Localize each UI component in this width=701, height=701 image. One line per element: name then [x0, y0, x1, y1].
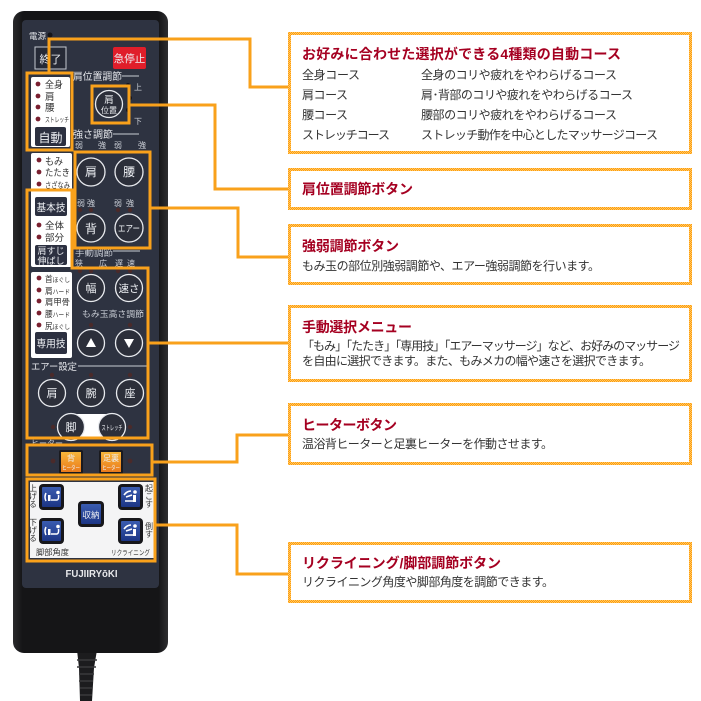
strength control: 強さ調節 [73, 128, 113, 141]
air settings: 座 [124, 387, 136, 400]
emergency stop button: 急停止 [114, 52, 145, 65]
panel: automatic courses: ストレッチコース [302, 128, 390, 142]
reclining and leg panel [28, 482, 155, 558]
auto course panel [31, 77, 70, 147]
auto course panel: ストレッチ [45, 116, 69, 124]
panel: strength button: 強弱調節ボタン [302, 238, 399, 254]
auto course panel: 自動 [38, 131, 63, 145]
panel: manual menu: 手動選択メニュー [302, 319, 412, 335]
power label and LED: 電源 [29, 31, 47, 41]
shoulder position control: 位置 [101, 105, 117, 115]
panel: manual menu [290, 306, 690, 380]
panel: manual menu: 「もみ」「たたき」「専用技」「エアーマッサージ」など、お好みのマッサージ [302, 339, 680, 353]
auto course panel: 肩 [45, 92, 55, 103]
heater buttons: ヒーター [102, 464, 120, 472]
auto course panel: 腰 [45, 103, 55, 114]
basic technique panel: 基本技 [36, 201, 66, 214]
strength control: 腰 [123, 165, 135, 179]
strength control: 強 [126, 198, 134, 208]
shoulder position control: 肩位置調節 [73, 70, 122, 83]
panel: reclining and leg button: リクライニング/脚部調節ボタン [302, 555, 501, 571]
basic technique panel: 肩すじ [37, 246, 65, 256]
auto course panel: 全身 [45, 79, 63, 91]
remote body [13, 11, 168, 653]
special technique panel: 肩甲骨 [45, 297, 70, 307]
reclining and leg panel: 倒す [144, 521, 154, 538]
heater buttons: ヒーター [62, 464, 80, 472]
manual control [75, 247, 145, 356]
manual control: 幅 [86, 282, 96, 295]
manual control: 速 [127, 258, 135, 268]
highlight: auto course [27, 39, 288, 150]
strength control: 弱 [114, 141, 122, 150]
manual control: 狭 [75, 258, 83, 268]
panel: heater button [290, 404, 690, 464]
strength control: 弱 [75, 141, 83, 150]
panel: automatic courses: 肩･背部のコリや疲れをやわらげるコース [421, 88, 633, 102]
strength control: 強 [98, 140, 106, 150]
panel: automatic courses: 全身のコリや疲れをやわらげるコース [421, 67, 617, 82]
strength control: 弱 [114, 199, 122, 208]
air settings: 肩 [46, 387, 58, 400]
strength control: 弱 [77, 199, 85, 208]
air settings: 脚 [66, 420, 76, 434]
panel: automatic courses: 腰コース [302, 108, 348, 122]
panel: shoulder position button [290, 170, 690, 208]
strength control [73, 128, 146, 242]
special technique panel [31, 272, 72, 358]
strength control: 強 [87, 198, 95, 208]
basic technique panel: さざなみ [45, 180, 70, 190]
air settings: ストレッチ [102, 424, 122, 432]
manual control: 広 [99, 259, 107, 268]
air settings: エアー設定 [31, 362, 77, 373]
highlight: strength [75, 152, 288, 257]
panel: automatic courses: お好みに合わせた選択ができる4種類の自動コース [302, 46, 621, 62]
highlight: manual [27, 190, 288, 438]
heater buttons [31, 439, 132, 474]
panel: automatic courses: 全身コース [302, 67, 360, 82]
brand logo: FUJIIRYōKI [66, 568, 118, 580]
heater buttons: 背 [67, 453, 75, 463]
panel: strength button: もみ玉の部位別強弱調節や、エアー強弱調節を行います。 [302, 259, 600, 273]
manual control: 遅 [115, 258, 123, 268]
basic technique panel: 部分 [45, 233, 64, 244]
reclining and leg panel: 上げる [28, 484, 38, 508]
special technique panel: 首ほぐし [45, 274, 70, 284]
manual control: 速さ [118, 283, 140, 295]
end button [35, 47, 66, 69]
special technique panel: 専用技 [36, 337, 66, 350]
shoulder position control: 肩 [104, 95, 114, 106]
basic technique panel [31, 153, 72, 267]
emergency stop button [113, 47, 146, 69]
panel: heater button: ヒーターボタン [302, 417, 397, 433]
panel: reclining and leg button [290, 544, 690, 602]
manual control: 手動調節 [75, 247, 113, 258]
panel: automatic courses: 肩コース [302, 88, 348, 102]
panel: strength button [290, 226, 690, 284]
panel: heater button: 温浴背ヒーターと足裏ヒーターを作動させます。 [302, 437, 553, 451]
reclining and leg panel: 下げる [28, 518, 38, 542]
special technique panel: 肩ハード [45, 286, 70, 296]
air settings: 腕 [86, 387, 96, 400]
faceplate [22, 20, 159, 588]
basic technique panel: もみ [45, 156, 63, 168]
highlight: heater [27, 435, 288, 475]
end button: 終了 [40, 53, 62, 66]
manual control: もみ玉高さ調節 [82, 309, 145, 319]
strength control: 肩 [85, 165, 97, 179]
shoulder position control [73, 70, 142, 126]
special technique panel: 腰ハード [45, 309, 70, 319]
panel: automatic courses: ストレッチ動作を中心としたマッサージコース [421, 127, 658, 142]
highlight: shoulder position [92, 86, 288, 189]
strength control: 強 [138, 140, 146, 150]
panel: reclining and leg button: リクライニング角度や脚部角度を調節できます。 [302, 574, 554, 589]
panel: automatic courses: 腰部のコリや疲れをやわらげるコース [421, 108, 617, 122]
strength control: 背 [85, 222, 97, 236]
reclining and leg panel: 収納 [82, 510, 100, 520]
callout highlights and connectors [27, 39, 288, 574]
panel: automatic courses [290, 34, 690, 152]
basic technique panel: 伸ばし [37, 255, 65, 266]
reclining and leg panel: 起こす [144, 484, 154, 508]
cord [77, 650, 97, 701]
heater buttons: 足裏 [103, 453, 119, 463]
strength control: エアー [118, 224, 140, 235]
panel: manual menu: を自由に選択できます。また、もみメカの幅や速さを選択できます。 [302, 353, 651, 368]
heater buttons: ヒーター [31, 439, 63, 448]
basic technique panel: たたき [45, 168, 70, 179]
panel: shoulder position button: 肩位置調節ボタン [302, 181, 413, 197]
reclining and leg panel: 脚部角度 [36, 547, 69, 557]
reclining and leg panel: リクライニング [111, 548, 150, 557]
shoulder position control: 上 [134, 83, 142, 92]
basic technique panel: 全体 [45, 220, 64, 232]
air settings [31, 362, 147, 440]
shoulder position control: 下 [134, 117, 142, 126]
remote control [13, 11, 168, 701]
highlight: reclining [27, 479, 288, 574]
special technique panel: 尻ほぐし [45, 321, 70, 331]
